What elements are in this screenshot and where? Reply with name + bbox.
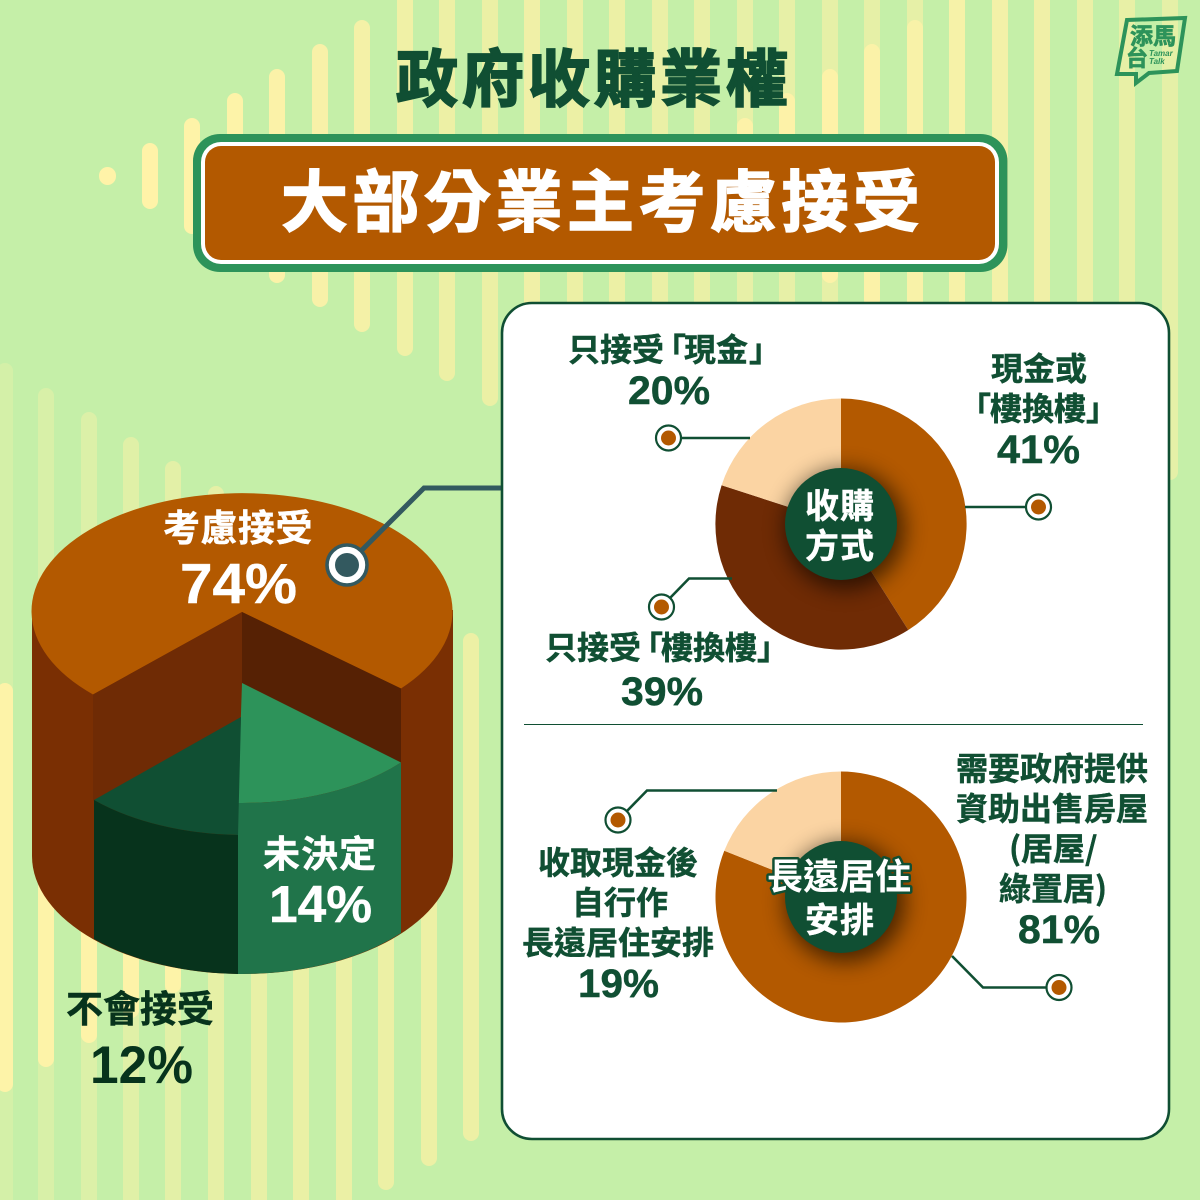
callout: 樓換樓 39%: [545, 578, 789, 714]
callout: 資助出售房屋 81%: 資助出售房屋: [956, 791, 1148, 827]
label: 74%: [163, 508, 312, 616]
label: 14%: [263, 834, 376, 934]
label: 74%: 考慮接受: [163, 508, 312, 549]
donut: 收購方式: 方式: [805, 528, 874, 566]
3D pie cylinder chart: [32, 493, 453, 974]
slice 14% top: [238, 683, 401, 803]
slice 12% front: [94, 800, 238, 974]
callout: 現金或樓換樓 41%: 「樓換樓」: [959, 391, 1118, 427]
callout: 現金或樓換樓 41%: 41%: [997, 428, 1080, 472]
callout: 現金 20%: [568, 332, 781, 450]
callout: 資助出售房屋 81%: (居屋/: [1009, 824, 1097, 870]
donut: 長遠居住安排: 安排: [805, 902, 874, 940]
label: 不會接受 12%: [66, 989, 214, 1095]
right cut face: [242, 612, 401, 763]
callout: 現金 20%: 只接受「現金」: [568, 332, 781, 368]
logo: Tamar Talk speech bubble: Talk: [1149, 57, 1165, 66]
callout: 樓換樓 39%: 只接受「樓換樓」: [545, 630, 789, 666]
callout: 資助出售房屋 81%: 81%: [1018, 908, 1100, 952]
callout: 自行作安排 19%: [522, 790, 777, 1006]
callout: 資助出售房屋 81%: [952, 751, 1148, 1000]
callout: 樓換樓 39%: 39%: [621, 670, 703, 714]
label: 不會接受 12%: 不會接受: [66, 989, 214, 1030]
top surface 74%: [32, 493, 453, 694]
logo: Tamar Talk speech bubble: 台: [1126, 41, 1148, 73]
callout: 現金或樓換樓 41%: 現金或: [991, 351, 1087, 387]
callout: 自行作安排 19%: 長遠居住安排: [522, 925, 714, 961]
callout: 現金或樓換樓 41%: [959, 351, 1118, 520]
slice 14% front: [238, 762, 401, 974]
logo: Tamar Talk speech bubble: [1117, 17, 1185, 83]
slice 12% top: [94, 717, 241, 835]
logo: Tamar Talk speech bubble: Tamar: [1149, 49, 1174, 58]
callout: 自行作安排 19%: 自行作: [572, 885, 668, 921]
connector from cylinder marker to panel: [327, 488, 503, 585]
callout: 現金 20%: 20%: [628, 369, 710, 413]
label: 14%: 14%: [269, 876, 372, 934]
left cut face: [93, 612, 242, 801]
callout: 自行作安排 19%: 19%: [578, 962, 659, 1006]
donut: 收購方式: 收購: [805, 488, 874, 526]
label: 74%: 74%: [180, 552, 297, 616]
subtitle banner: [193, 134, 1008, 272]
subtitle banner: 大部分業主考慮接受: [281, 166, 920, 241]
cylinder body side: [32, 610, 453, 974]
callout: 資助出售房屋 81%: 需要政府提供: [956, 751, 1148, 787]
callout: 資助出售房屋 81%: 綠置居): [999, 864, 1107, 910]
donut: 長遠居住安排: [715, 771, 966, 1022]
logo: Tamar Talk speech bubble: 添馬: [1130, 17, 1176, 51]
callout: 自行作安排 19%: 收取現金後: [538, 845, 698, 881]
donut: 長遠居住安排: 長遠居住: [767, 856, 911, 897]
title: 政府收購業權: [396, 46, 788, 115]
label: 不會接受 12%: 12%: [90, 1036, 193, 1095]
donut: 收購方式: [715, 398, 967, 650]
label: 14%: 未決定: [263, 834, 376, 875]
panel: details: [502, 303, 1169, 1139]
